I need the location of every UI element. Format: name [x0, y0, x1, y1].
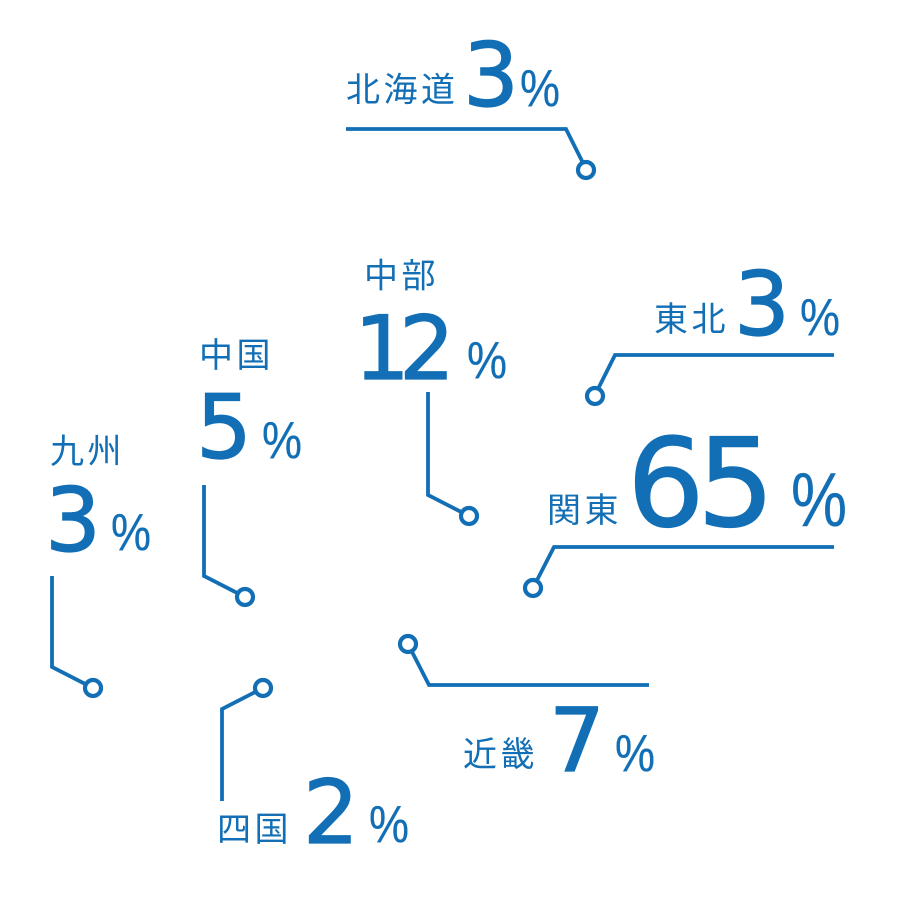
percent sign: %	[520, 60, 560, 118]
value: 3: 3	[463, 24, 519, 127]
label: Hokkaido: 北海道	[346, 72, 458, 110]
region: Hokkaido	[346, 24, 594, 178]
label: Shikoku: 四国	[217, 811, 292, 849]
region: Chugoku	[196, 337, 302, 605]
region: Chubu	[354, 258, 507, 524]
label: Chubu: 中部	[364, 258, 439, 296]
percent sign: %	[111, 504, 151, 562]
connector	[525, 547, 834, 596]
connector	[222, 680, 271, 801]
connector	[428, 392, 477, 524]
connector	[346, 129, 594, 178]
percent sign: %	[791, 458, 847, 543]
connector	[52, 576, 101, 696]
percent sign: %	[615, 725, 655, 783]
percent sign: %	[800, 289, 840, 347]
percent sign: %	[467, 332, 507, 390]
percent sign: %	[262, 412, 302, 470]
region: Tohoku	[587, 253, 840, 404]
label: Kyushu: 九州	[50, 433, 125, 471]
label: Chugoku: 中国	[199, 337, 274, 375]
label: Kanto: 関東	[547, 492, 622, 530]
region: Kinki	[400, 636, 655, 792]
value: 2: 2	[303, 761, 359, 864]
value: 7: 7	[549, 689, 605, 792]
label: Kinki: 近畿	[463, 736, 538, 774]
connector	[400, 636, 649, 685]
value: 3: 3	[734, 253, 790, 356]
value: 65: 65	[627, 413, 775, 555]
value: 12: 12	[354, 297, 455, 400]
region: Kyushu	[45, 433, 151, 696]
region: Kanto	[525, 413, 847, 596]
region: Shikoku	[217, 680, 409, 864]
connector	[587, 355, 834, 404]
connector	[204, 485, 253, 605]
percent sign: %	[369, 796, 409, 854]
value: 5: 5	[196, 376, 252, 479]
label: Tohoku: 東北	[654, 301, 729, 339]
value: 3: 3	[45, 469, 101, 572]
